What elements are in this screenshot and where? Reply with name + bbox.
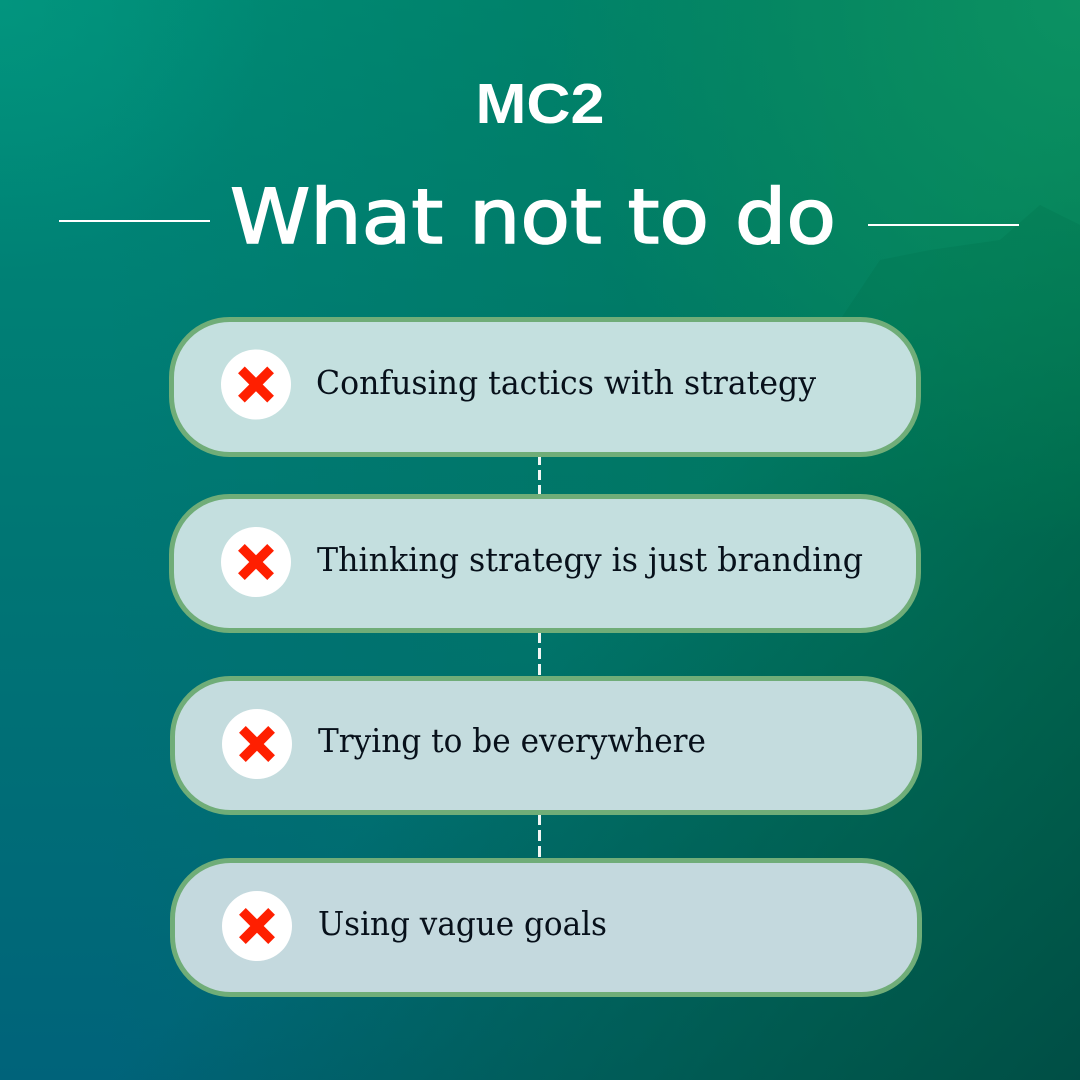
text: item 2: Thinking strategy is just branding <box>317 540 863 579</box>
icon: red cross 2 <box>221 527 291 597</box>
dashed connector 2 <box>538 632 541 677</box>
icon: red cross 4 <box>222 891 292 961</box>
panel: be everywhere <box>172 678 920 812</box>
text: item 3: Trying to be everywhere <box>318 721 706 760</box>
icon: red cross 3 <box>222 709 292 779</box>
icon: red cross 1 <box>221 350 291 420</box>
dashed connector 3 <box>538 814 541 859</box>
panel: confusing tactics <box>172 320 918 454</box>
title rule: right <box>868 224 1019 226</box>
title rule: left <box>59 220 210 222</box>
panel: vague goals <box>172 860 920 994</box>
dashed connector 1 <box>538 455 541 495</box>
title: What not to do <box>230 172 836 261</box>
panel: just branding <box>172 496 918 630</box>
logo: MC2: MC2 <box>476 72 604 136</box>
text: item 4: Using vague goals <box>318 904 607 943</box>
text: item 1: Confusing tactics with strategy <box>316 363 816 402</box>
